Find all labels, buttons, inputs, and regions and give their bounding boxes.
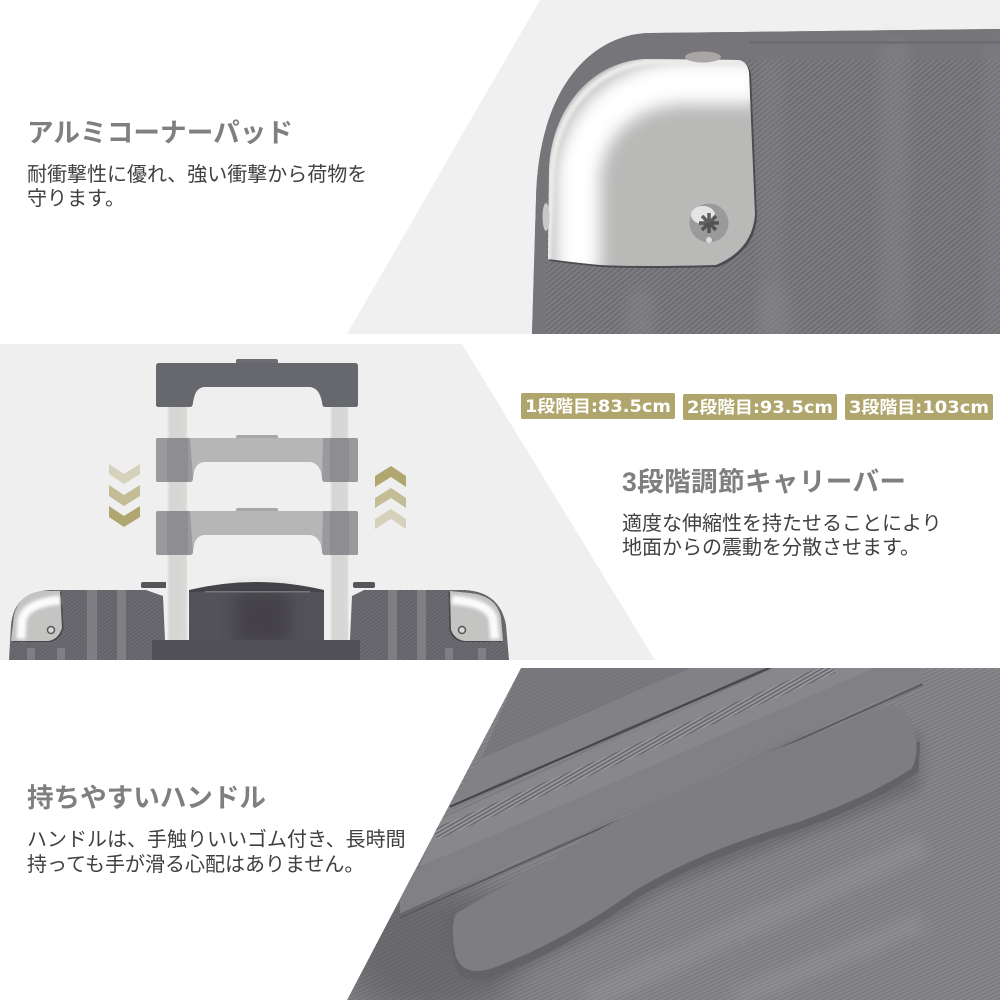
left silver corner <box>11 591 64 642</box>
fabric strip <box>420 668 880 867</box>
right shell <box>350 590 509 660</box>
suitcase body <box>532 29 1000 334</box>
suitcase top <box>9 582 509 660</box>
screw: pad top <box>685 52 721 62</box>
label: position 2: 2段階目:93.5cm <box>687 398 833 418</box>
shell ribs <box>27 590 486 660</box>
corner pad photo <box>532 29 1000 334</box>
handle grip <box>453 705 917 971</box>
lower position handle <box>156 508 358 555</box>
screw: pad side <box>542 203 550 231</box>
label: position 1 <box>521 393 675 419</box>
text: carry bar description: 地面からの震動を分散させます。 <box>622 536 920 559</box>
panel: aluminium corner pad <box>347 0 1000 370</box>
panel: handle photo <box>340 665 1000 1000</box>
photo base <box>347 668 1000 1000</box>
handle shadow on shell <box>450 732 920 985</box>
label: position 2 <box>683 394 837 420</box>
bottom bar <box>152 640 360 660</box>
panel background <box>347 0 1000 334</box>
screw: pad face <box>690 204 728 243</box>
label: position 3: 3段階目:103cm <box>849 398 989 418</box>
middle position handle <box>156 435 358 482</box>
shell waves <box>587 845 923 1000</box>
aluminium corner <box>548 59 760 275</box>
handle rim <box>453 742 920 979</box>
lower-left shade <box>340 880 520 1000</box>
telescopic rods <box>166 405 350 640</box>
text: carry bar description: 適度な伸縮性を持たせることにより <box>622 512 942 535</box>
heading: telescopic carry bar: 3段階調節キャリーバー <box>622 467 906 497</box>
text: handle description: 持っても手が滑る心配はありません。 <box>27 853 364 876</box>
upper textured area <box>482 668 687 758</box>
text: aluminium corner pad description: 守ります。 <box>27 187 125 210</box>
groove line lower <box>400 684 923 918</box>
suitcase top rim <box>532 29 1000 334</box>
zipper <box>435 668 833 834</box>
handle legs <box>530 787 877 955</box>
icon: chevrons down <box>109 464 140 527</box>
lower rib <box>400 668 923 913</box>
panel background <box>0 344 655 660</box>
label: position 3 <box>845 394 993 420</box>
panel: telescopic carry bar <box>0 344 655 660</box>
icon: chevrons up <box>375 466 406 529</box>
side handles <box>141 582 375 588</box>
label: position 1: 1段階目:83.5cm <box>525 397 671 417</box>
groove line <box>450 668 770 807</box>
heading: easy-grip handle: 持ちやすいハンドル <box>27 783 266 813</box>
upper rib <box>452 667 767 803</box>
centre compartment <box>189 582 324 645</box>
suitcase ribs <box>628 41 1000 334</box>
text: aluminium corner pad description: 耐衝撃性に優れ、強い衝撃から荷物を <box>27 163 367 186</box>
left shell <box>9 590 165 660</box>
text: handle description: ハンドルは、手触りいいゴム付き、長時間 <box>27 828 406 851</box>
right silver corner <box>448 591 503 642</box>
top position handle <box>156 359 358 407</box>
heading: aluminium corner pad: アルミコーナーパッド <box>27 118 293 148</box>
